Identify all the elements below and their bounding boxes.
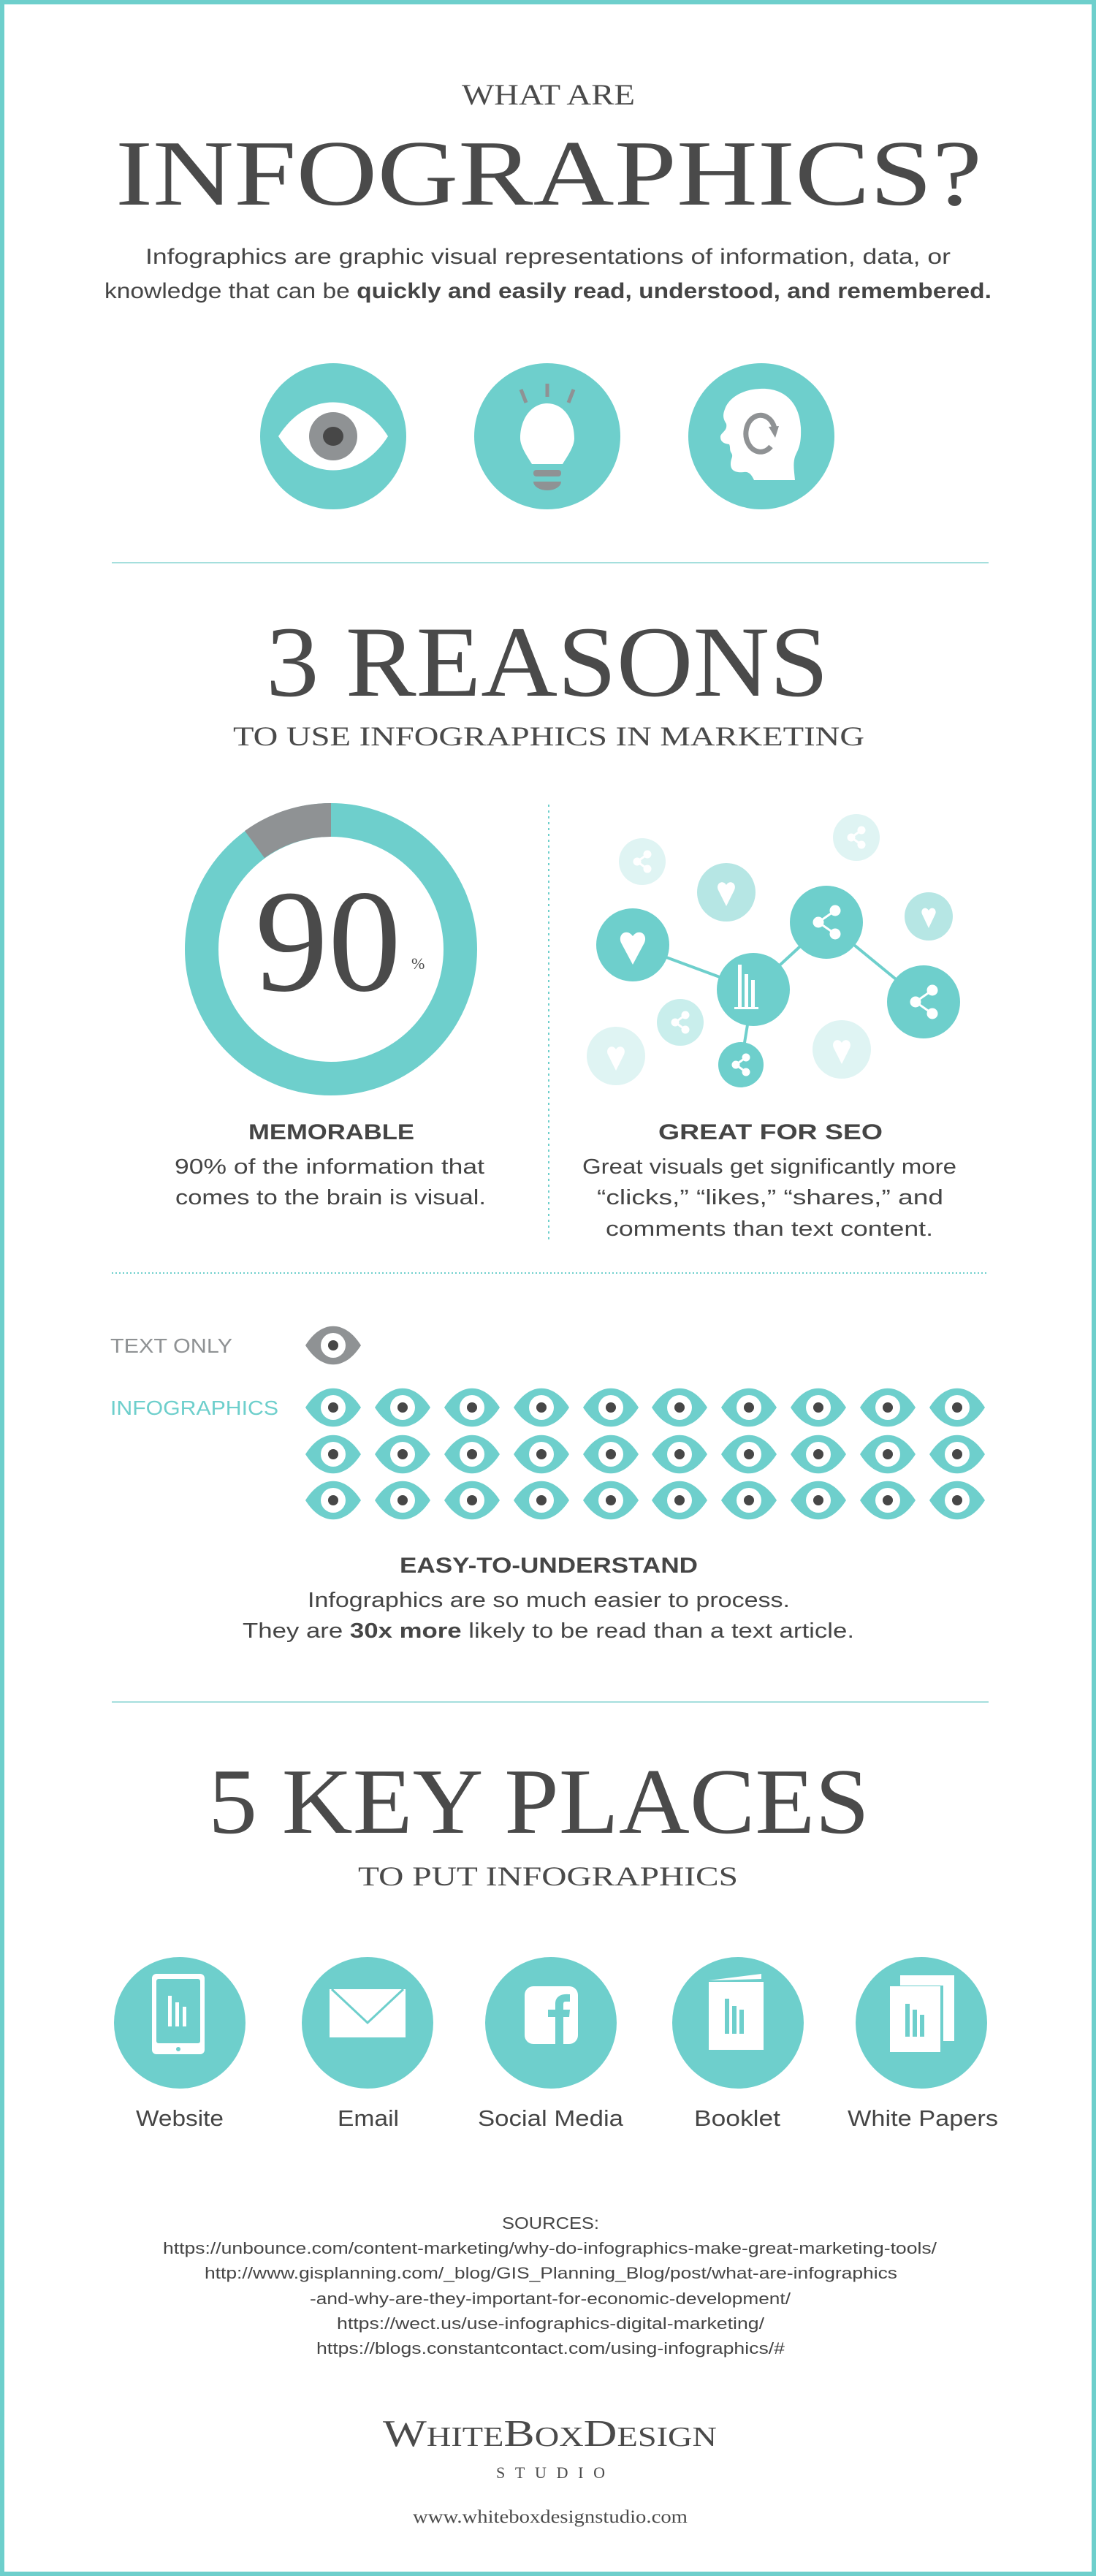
title: what are: WHAT ARE xyxy=(462,78,635,111)
place labels: Email xyxy=(338,2105,399,2131)
text: easy to understand: EASY-TO-UNDERSTAND xyxy=(400,1554,698,1578)
logo: whitebox design studio xyxy=(383,2413,717,2482)
logo: whitebox design studio: STUDIO xyxy=(496,2463,605,2482)
place labels: Website xyxy=(136,2105,224,2131)
sources: http://www.gisplanning.com/_blog/GIS_Planning_Blog/post/what-are-infographics xyxy=(205,2264,897,2282)
icon: website xyxy=(114,1957,246,2089)
text: great for seo: GREAT FOR SEO xyxy=(658,1120,883,1144)
divider xyxy=(112,1701,989,1703)
intro paragraph: Infographics are graphic visual representations of information, data, or xyxy=(145,245,951,269)
text: great for seo: comments than text content. xyxy=(606,1217,933,1241)
intro paragraph: knowledge that can be quickly and easily read, understood, and remembered. xyxy=(104,279,992,303)
website url: www.whiteboxdesignstudio.com xyxy=(413,2507,688,2527)
logo: whitebox design studio: W HITE BOXDESIGN xyxy=(383,2413,717,2455)
network illustration: social SEO xyxy=(587,814,960,1087)
donut chart 90%: 90 xyxy=(255,861,401,1022)
text: easy to understand: They are 30x more likely to be read than a text article. xyxy=(243,1619,854,1643)
icon: head with refresh xyxy=(688,363,834,509)
text: memorable: MEMORABLE xyxy=(248,1120,414,1144)
icon: email xyxy=(302,1957,433,2089)
sources: https://blogs.constantcontact.com/using-infographics/# xyxy=(316,2339,785,2357)
intro paragraph xyxy=(104,245,992,303)
donut chart 90%: % xyxy=(411,954,425,973)
text: easy to understand: Infographics are so much easier to process. xyxy=(308,1589,790,1612)
text: great for seo: “clicks,” “likes,” “shares,” and xyxy=(597,1186,943,1209)
icon: booklet xyxy=(672,1957,804,2089)
icon: eye xyxy=(260,363,406,509)
heading: 5 key places: 5 KEY PLACES xyxy=(208,1749,869,1853)
icon: gray eye xyxy=(305,1326,361,1364)
label: infographics: INFOGRAPHICS xyxy=(110,1397,278,1419)
place labels xyxy=(136,2105,998,2131)
text: memorable xyxy=(175,1120,486,1209)
icon: white papers xyxy=(856,1957,987,2089)
text: great for seo xyxy=(582,1120,956,1241)
title: infographics: INFOGRAPHICS? xyxy=(115,121,982,225)
donut chart 90% xyxy=(202,803,460,1079)
sources: -and-why-are-they-important-for-economic-development/ xyxy=(310,2290,791,2308)
sources: https://unbounce.com/content-marketing/why-do-infographics-make-great-marketing-tools/ xyxy=(163,2239,937,2257)
sources: SOURCES: xyxy=(502,2214,599,2233)
subheading: TO PUT INFOGRAPHICS xyxy=(358,1862,738,1892)
vertical dotted divider xyxy=(548,805,549,1240)
label: text only: TEXT ONLY xyxy=(110,1334,232,1357)
text: memorable: 90% of the information that xyxy=(175,1155,484,1179)
eye grid 30 eyes xyxy=(305,1388,985,1519)
subheading: TO USE INFOGRAPHICS IN MARKETING xyxy=(233,722,864,752)
heading: 3 reasons: 3 REASONS xyxy=(266,606,829,718)
icon: social media facebook xyxy=(485,1957,617,2089)
place labels: Booklet xyxy=(694,2105,780,2131)
place labels: White Papers xyxy=(848,2105,998,2131)
place labels: Social Media xyxy=(478,2105,624,2131)
icon: lightbulb xyxy=(474,363,620,509)
text: easy to understand xyxy=(243,1554,854,1643)
sources: https://wect.us/use-infographics-digital-marketing/ xyxy=(337,2314,765,2333)
text: great for seo: Great visuals get significantly more xyxy=(582,1155,956,1179)
text: memorable: comes to the brain is visual. xyxy=(175,1186,486,1209)
divider xyxy=(112,562,989,563)
horizontal dotted divider xyxy=(112,1272,989,1274)
sources xyxy=(163,2214,937,2357)
